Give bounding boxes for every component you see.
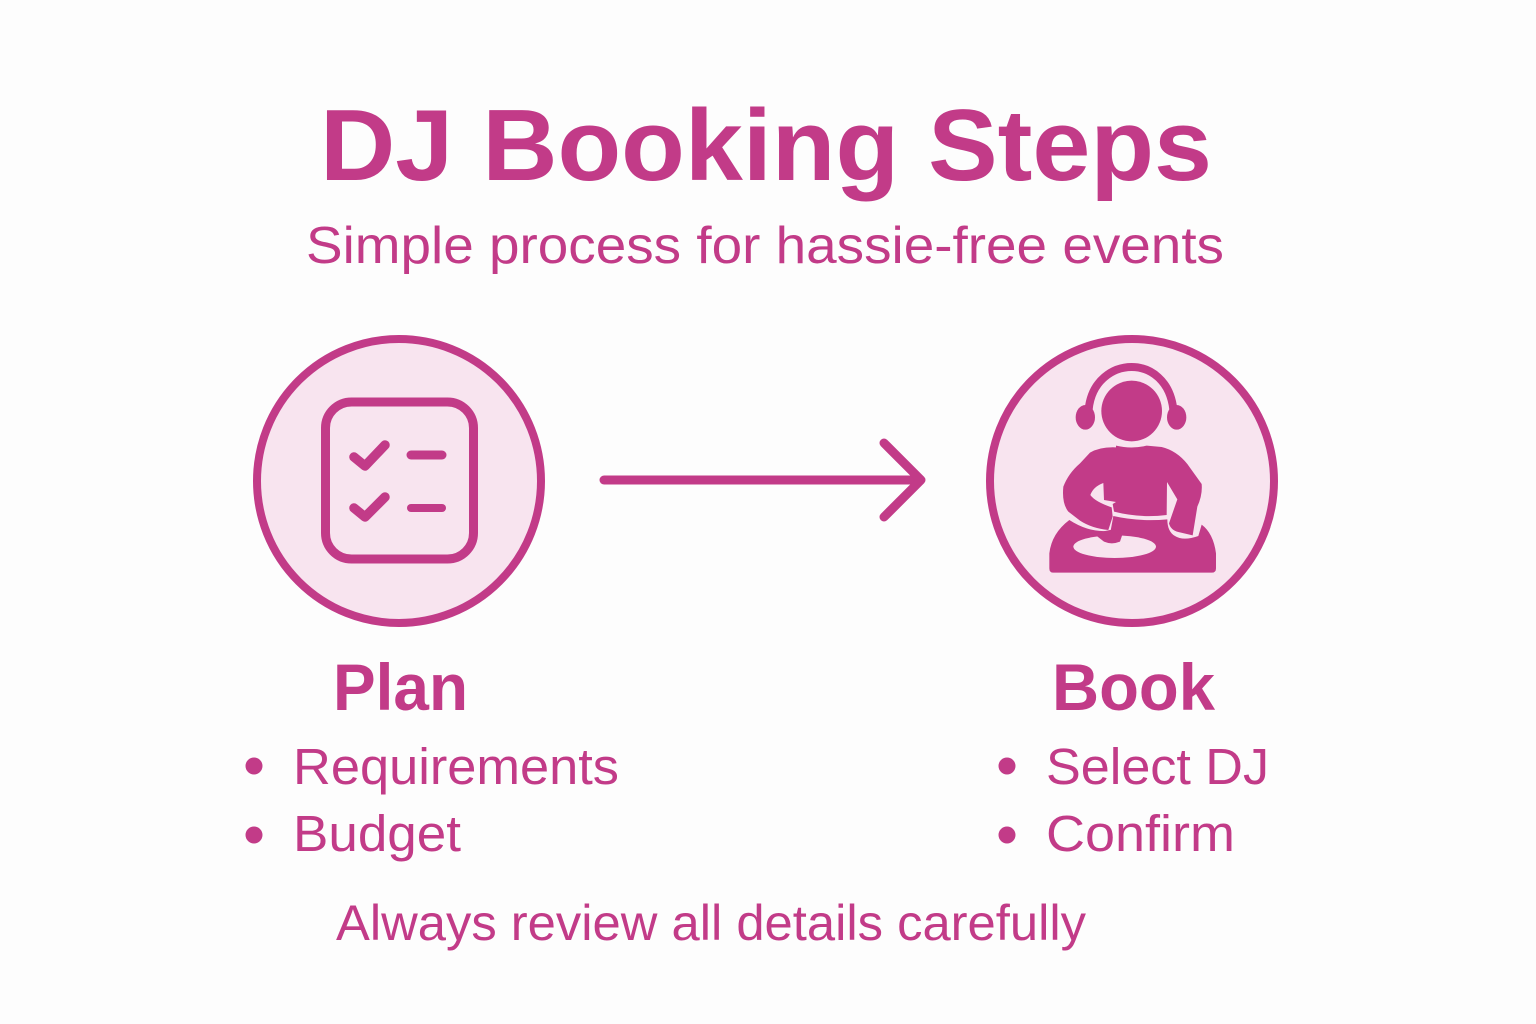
book bullet list: Confirm	[1046, 805, 1235, 862]
plan heading: Plan	[333, 650, 468, 724]
subtitle: Simple process for hassie-free events	[306, 217, 1224, 275]
plan circle badge	[257, 339, 541, 623]
panel: plan	[246, 339, 619, 862]
book bullet list: Select DJ	[1046, 738, 1269, 795]
icon: checklist	[326, 402, 474, 559]
book heading: Book	[1052, 650, 1215, 724]
arrow: plan to book	[604, 443, 921, 517]
panel: book	[990, 339, 1274, 862]
book circle badge	[990, 339, 1274, 623]
plan bullet list	[246, 738, 619, 862]
title: DJ Booking Steps	[320, 90, 1212, 202]
headphones	[1076, 367, 1186, 430]
head	[1101, 381, 1162, 441]
plan bullet list: Requirements	[293, 738, 619, 795]
plan bullet list: Budget	[293, 805, 461, 862]
turntable deck	[1049, 516, 1216, 573]
footer note: Always review all details carefully	[336, 895, 1086, 951]
hand on record	[1093, 529, 1123, 543]
torso and arms	[1063, 446, 1202, 535]
vinyl record	[1073, 535, 1156, 558]
icon: dj at turntable	[1049, 367, 1216, 573]
book bullet list	[998, 738, 1269, 862]
